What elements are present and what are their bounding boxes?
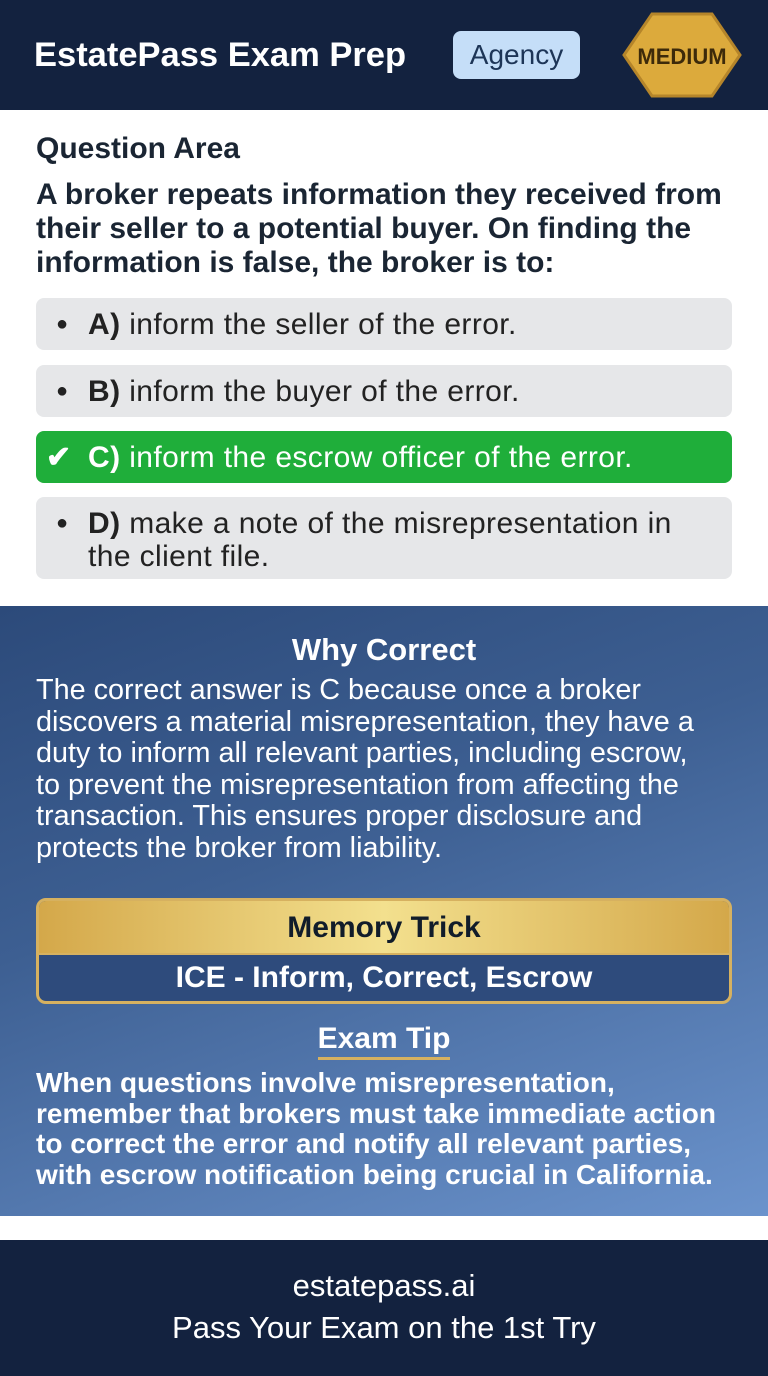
exam tip text: remember that brokers must take immediate action (36, 1098, 716, 1128)
footer (0, 1240, 768, 1376)
option B: B) inform the buyer of the error. (88, 375, 520, 408)
memory trick heading: Memory Trick (287, 911, 481, 944)
option C correct: ✔ (46, 441, 72, 474)
explanation text (36, 674, 694, 864)
option A: ● (56, 313, 68, 335)
header bar (0, 0, 768, 110)
explanation text: discovers a material misrepresentation, they have a (36, 706, 694, 738)
explanation panel (0, 606, 768, 1216)
explanation text: transaction. This ensures proper disclosure and (36, 800, 642, 832)
exam tip text: When questions involve misrepresentation, (36, 1067, 615, 1098)
memory trick text: ICE - Inform, Correct, Escrow (176, 961, 592, 994)
exam tip text: to correct the error and notify all relevant parties, (36, 1128, 691, 1159)
memory trick heading (39, 901, 729, 953)
badge: medium (622, 12, 742, 98)
option A: A) inform the seller of the error. (88, 308, 517, 341)
option B: ● (56, 380, 68, 402)
option D: ● (56, 512, 68, 534)
heading: why correct: Why Correct (292, 632, 476, 667)
option A (36, 298, 732, 350)
heading: exam tip: Exam Tip (318, 1022, 450, 1055)
explanation text: The correct answer is C because once a broker (36, 674, 641, 706)
explanation text: duty to inform all relevant parties, including escrow, (36, 737, 687, 769)
footer site: estatepass.ai (293, 1268, 475, 1303)
explanation text: protects the broker from liability. (36, 832, 442, 864)
exam tip text (36, 1067, 716, 1190)
explanation text: to prevent the misrepresentation from affecting the (36, 768, 679, 800)
option B (36, 365, 732, 417)
badge: medium: MEDIUM (637, 44, 727, 69)
memory trick box (36, 898, 732, 1004)
title: EstatePass Exam Prep (34, 36, 406, 74)
option C correct (36, 431, 732, 483)
heading: question area: Question Area (36, 132, 240, 165)
footer tagline: Pass Your Exam on the 1st Try (172, 1310, 596, 1345)
option D (36, 497, 732, 579)
option C correct: C) inform the escrow officer of the error. (88, 441, 633, 474)
badge: agency (453, 31, 580, 79)
memory trick text (39, 953, 729, 1001)
badge: agency: Agency (470, 39, 563, 70)
question text: A broker repeats information they received from their seller to a potential buyer. On finding the information is false, the broker is to: (36, 178, 722, 279)
exam tip text: with escrow notification being crucial in California. (36, 1158, 713, 1190)
option D: D) make a note of the misrepresentation in (88, 507, 672, 540)
option D: the client file. (88, 540, 270, 573)
